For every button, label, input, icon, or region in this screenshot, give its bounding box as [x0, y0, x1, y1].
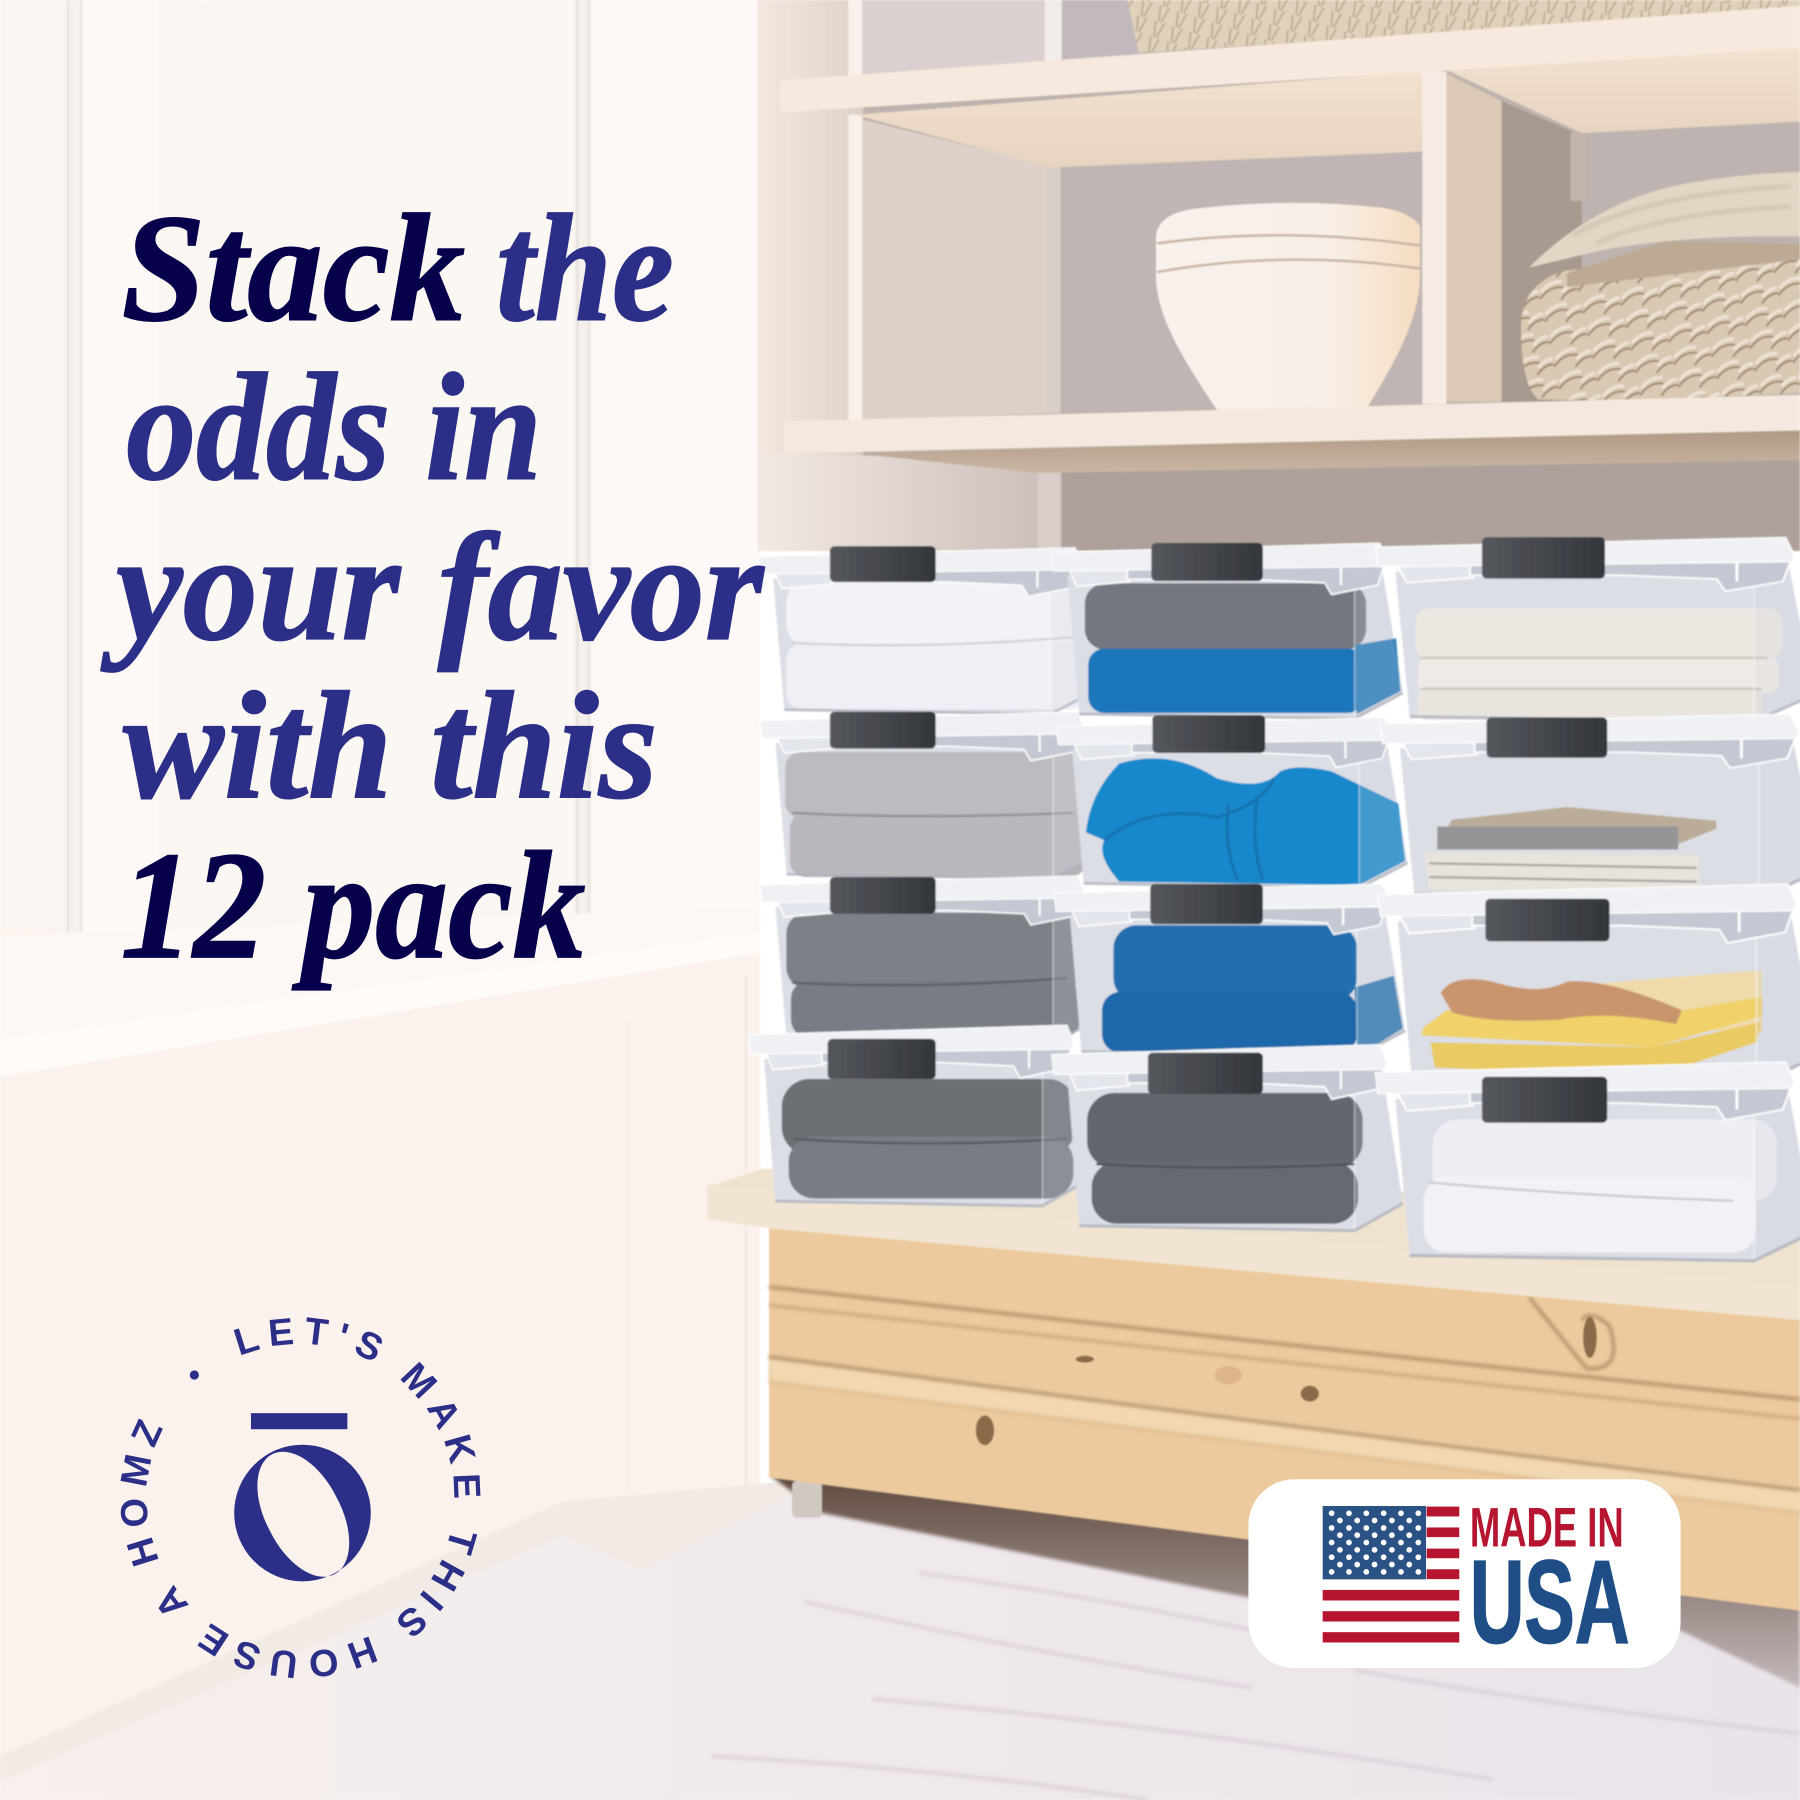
floor	[0, 1492, 1800, 1800]
bowl	[1156, 203, 1420, 410]
baseboard	[0, 1481, 798, 1782]
box: grey and blue towels, centre column row 1	[1052, 543, 1403, 719]
badge text	[1470, 1495, 1629, 1669]
wood bench	[707, 1169, 1800, 1688]
headline line 1: Stack	[122, 184, 465, 354]
circular tagline: LET'S MAKE THIS HOUSE A HOMZ	[120, 1317, 480, 1678]
box: blue hoodie, centre column row 2	[1056, 715, 1407, 888]
middle shelf	[784, 395, 1800, 473]
center divider	[1422, 71, 1446, 404]
letter o mark	[234, 1445, 371, 1581]
storage boxes stack	[748, 537, 1800, 1261]
headline line 3: your favor	[100, 503, 764, 673]
box: white towels, left column row 1	[758, 546, 1097, 714]
american flag	[1323, 1506, 1459, 1642]
box: slate towels, centre column row 4	[1052, 1045, 1403, 1231]
badge text: USA	[1470, 1537, 1629, 1669]
box: tan and yellow clothes, right column row 3	[1378, 884, 1800, 1085]
headline line 1	[122, 184, 674, 354]
top shelf	[781, 6, 1800, 168]
top basket	[1127, 0, 1800, 53]
headline	[100, 184, 764, 991]
badge text: MADE IN	[1470, 1495, 1624, 1558]
headline line 4: with this	[123, 661, 658, 831]
badge background	[1248, 1479, 1681, 1668]
box: charcoal towels, left column row 3	[760, 876, 1100, 1043]
made in USA badge	[1248, 1479, 1681, 1669]
wicker basket	[1521, 172, 1800, 400]
macron bar	[251, 1413, 347, 1429]
headline line 1: the	[496, 184, 674, 354]
headline line 2: odds in	[126, 343, 542, 513]
window and left wall	[0, 0, 760, 1800]
box: deep blue towels, centre column row 3	[1054, 884, 1405, 1056]
box: grey towels, left column row 2	[760, 712, 1100, 879]
box: dark grey towels, left column row 4	[748, 1025, 1089, 1206]
wood knots	[976, 1415, 994, 1445]
headline line 5: 12 pack	[121, 821, 585, 991]
brand logo seal	[120, 1317, 480, 1678]
wall behind shelves	[758, 0, 1800, 551]
side panel	[848, 0, 1061, 420]
floor streaks	[712, 1544, 1800, 1800]
back wall compartments	[1062, 73, 1800, 412]
box: white towels, right column row 4	[1375, 1062, 1800, 1261]
box: notebooks and papers, right column row 2	[1380, 714, 1800, 898]
box: cream towels, right column row 1	[1375, 537, 1800, 721]
